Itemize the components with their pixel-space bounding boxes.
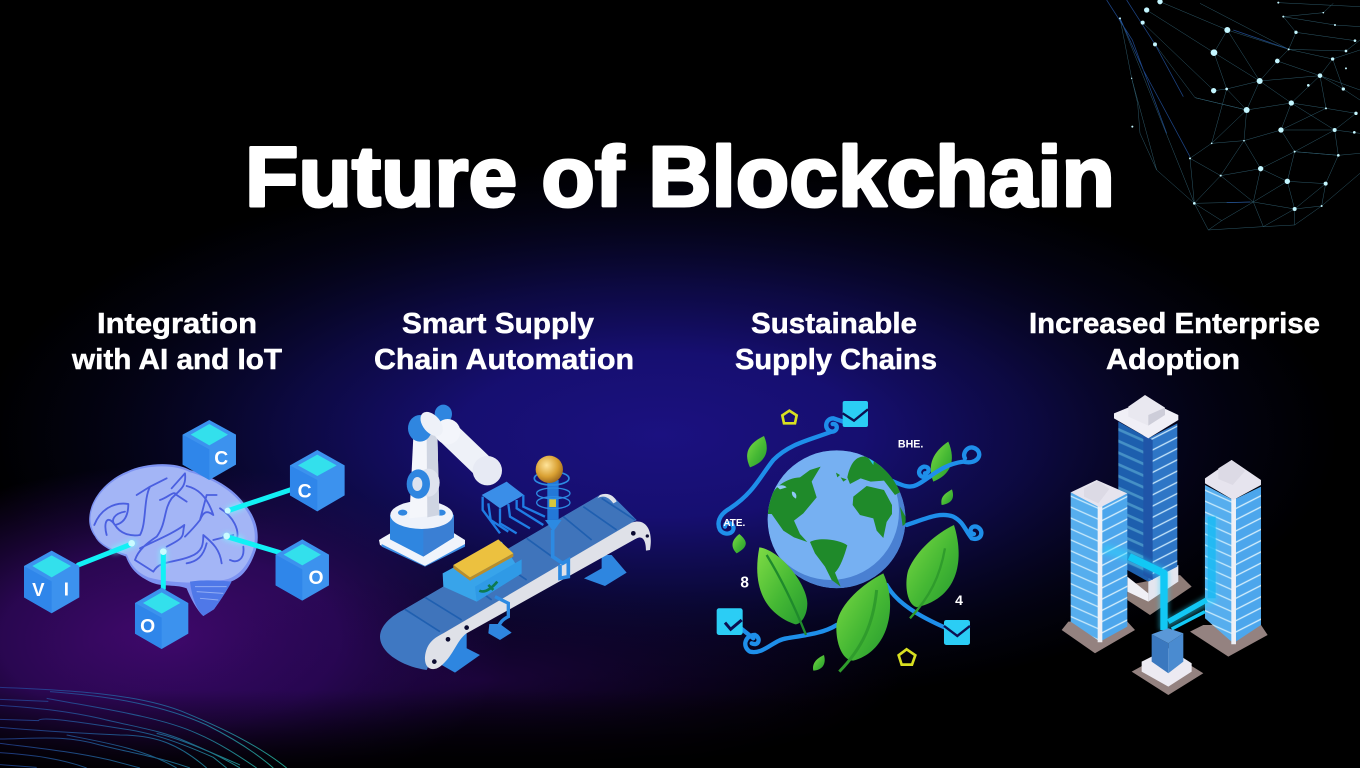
illustration: enterprise towers [1062,395,1268,695]
heading: integration line 2: with AI and IoT [71,344,282,376]
heading: smart supply line 2: Chain Automation [374,344,634,376]
icon: envelopes and checks [717,401,970,645]
cube: O bottom [135,588,188,649]
heading: enterprise line 2: Adoption [1106,344,1240,376]
cube: C right [290,450,345,511]
icon: tower left [1062,480,1135,653]
title: Future of Blockchain [245,130,1115,225]
cube: V I: I [64,578,69,599]
icon: globe [762,443,908,588]
heading: smart supply: Smart Supply [402,308,594,340]
icon: small leaves [732,436,953,671]
icon: conveyor legs [442,555,627,673]
icon: gripper [482,482,545,533]
cube: O right: O [308,568,323,589]
icon: yellow stars [782,411,915,665]
cube: C right: C [298,481,312,502]
heading: integration: Integration [97,308,257,340]
icon: tower right [1190,460,1268,657]
globe labels: 8 [740,574,749,591]
illustration: brain with connected cubes [24,420,345,649]
icon: big leaves [757,525,959,672]
globe labels: ATE. [723,518,746,529]
icon: package box [443,539,522,627]
heading: sustainable line 2: Supply Chains [735,344,937,376]
icon: cyan links [1103,517,1212,630]
network mesh decoration, top right [1107,0,1360,230]
icon: ribbons [718,418,981,652]
icon: robot base [379,498,465,567]
globe labels: BHE. [898,438,923,450]
cube: V I: V [32,579,45,600]
wave line decoration, bottom left [0,687,287,768]
icon: conveyor belt [380,494,651,670]
icon: golden ball on dispenser [534,456,570,578]
cube: V I [24,551,79,613]
icon: tower back [1114,395,1192,615]
heading: enterprise: Increased Enterprise [1029,308,1320,340]
cube: O bottom: O [140,616,155,637]
heading: sustainable: Sustainable [751,308,917,340]
link lines [78,487,300,588]
icon: central pillar [1132,628,1203,695]
globe labels: 4 [955,592,963,608]
illustration: robot arm and conveyor [379,405,651,673]
cube: C top [183,420,236,480]
cube: C top: C [214,449,228,470]
icon: brain [89,464,258,616]
cube: O right [276,539,329,601]
icon: robot arm [407,405,502,518]
illustration: globe with leaves [717,401,981,672]
globe labels [723,438,963,608]
